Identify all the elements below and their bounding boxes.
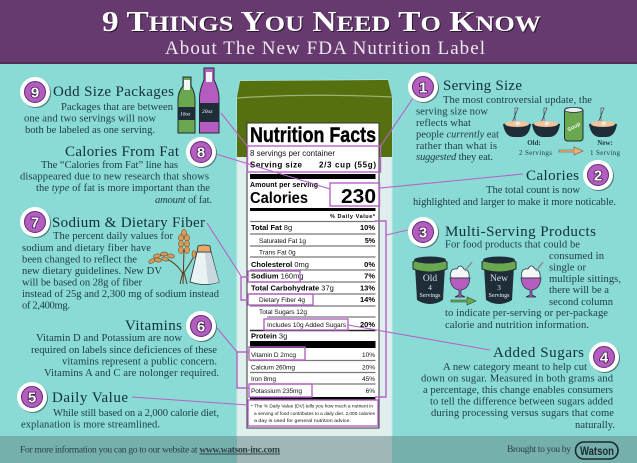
header banner <box>0 0 637 64</box>
body text: suggested they eat. <box>416 152 493 163</box>
panel: 4 added sugars <box>421 342 620 431</box>
subtitle: About The New FDA Nutrition Label <box>165 38 485 59</box>
body text: highlighted and larger to make it more noticable. <box>413 197 616 208</box>
body text: of 2,400mg. <box>22 300 70 312</box>
nutrient rows: Total Fat 8g <box>251 223 292 232</box>
icon: bottles <box>178 68 219 133</box>
icon: old and new containers with sundaes: Servings <box>488 293 510 299</box>
body text: While still based on a 2,000 calorie diet, <box>53 408 219 419</box>
heading: Vitamins <box>125 318 182 334</box>
nutrient rows: Sodium 160mg <box>251 272 304 280</box>
body text: Vitamins A and C are nolonger required. <box>44 368 219 379</box>
badge 2: 2 <box>594 168 602 184</box>
servings <box>250 149 376 170</box>
badge 4: 4 <box>600 350 609 366</box>
calories: Amount per serving <box>250 182 318 189</box>
purple highlight boxes and connectors <box>132 98 523 426</box>
servings: Serving size <box>250 160 303 170</box>
heading: Added Sugars <box>493 345 584 361</box>
icon: bowls and soup can: 1 Serving <box>590 149 620 157</box>
nutrient rows: Protein 3g <box>251 332 287 340</box>
body text: multiple sittings, <box>549 274 621 285</box>
footnote: a serving of food contributes to a daily diet. 2,000 calories <box>254 411 376 417</box>
icon: old and new containers with sundaes: Servings <box>420 293 441 299</box>
footer website text: For more information you can go to our website at www.watson-inc.com <box>20 444 280 456</box>
panel: 5 daily value <box>17 382 219 430</box>
body text <box>413 185 616 208</box>
badge 8 <box>186 137 217 168</box>
nutrient rows: Saturated Fat 1g <box>259 238 306 245</box>
body text: The “Calories from Fat” line has <box>41 160 178 171</box>
body text <box>22 231 220 312</box>
badge 1: 1 <box>419 80 427 96</box>
nutrient rows: 0% <box>364 260 375 269</box>
panel: 8 calories from fat <box>20 137 217 206</box>
body text: new dietary guidelines. New DV <box>22 266 162 277</box>
icon: old and new containers with sundaes: Old <box>423 274 437 284</box>
nutrient rows: 7% <box>364 272 375 280</box>
badge 4 <box>589 342 620 373</box>
body text: required on labels since deficiences of these <box>31 345 217 356</box>
body text: Vitamin D and Potassium are now <box>36 333 182 344</box>
body text: instead of 25g and 2,300 mg of sodium instead <box>22 289 220 300</box>
label title: Nutrition Facts <box>250 124 376 147</box>
badge 5 <box>17 382 48 413</box>
servings: 2/3 cup (55g) <box>319 160 376 170</box>
panel: 2 calories <box>413 160 616 208</box>
heading: Serving Size <box>443 78 522 94</box>
badge 8: 8 <box>197 144 205 162</box>
footnote <box>251 404 376 424</box>
body text: people currently eat <box>416 130 499 140</box>
icon: old and new containers with sundaes: New <box>490 274 508 284</box>
body text: Packages that are between <box>61 102 174 113</box>
nutrient rows: 45% <box>362 376 375 383</box>
nutrient rows: Cholesterol 0mg <box>251 260 309 269</box>
badge 2 <box>583 160 614 191</box>
body text: to tell the difference between sugars added <box>430 396 614 408</box>
calories <box>250 182 376 208</box>
body text: The percent daily values for <box>53 231 173 242</box>
badge 3: 3 <box>419 224 427 242</box>
panel: 9 odd size packages <box>20 68 219 136</box>
body text: reflects what <box>416 118 471 129</box>
body text: one and two servings will now <box>24 114 156 124</box>
body text: A new category meant to help cut <box>443 362 587 373</box>
nutrient rows: Vitamin D 2mcg <box>251 352 296 359</box>
product box <box>237 80 392 463</box>
badge 1 <box>408 72 439 103</box>
body text: both be labeled as one serving. <box>25 125 155 136</box>
heading: Sodium & Dietary Fiber <box>52 215 205 231</box>
nutrient rows: 5% <box>365 238 376 245</box>
nutrient rows: Trans Fat 0g <box>259 250 296 256</box>
nutrient rows: Total Carbohydrate 37g <box>251 284 334 292</box>
icon: old and new containers with sundaes: 4 <box>428 283 432 292</box>
nutrient rows: Potassium 235mg <box>251 388 302 395</box>
body text: vitamins represent a public concern. <box>62 356 217 368</box>
icon: old and new containers with sundaes: 3 <box>497 283 501 292</box>
body text <box>445 240 621 331</box>
badge 9: 9 <box>31 84 39 102</box>
body text: second column <box>549 297 614 308</box>
body text: single or <box>549 262 586 274</box>
heading: Multi-Serving Products <box>445 224 596 240</box>
nutrient rows: 6% <box>366 388 375 395</box>
icon: bowls and soup can: New: <box>597 139 613 147</box>
body text: down on sugar. Measured in both grams and <box>421 374 614 384</box>
title: 9 T HINGS YOU NEED TO K NOW <box>102 7 541 38</box>
body text: For food products that could be <box>445 240 580 250</box>
calories: Calories <box>250 190 308 207</box>
body text: there will be a <box>549 285 609 296</box>
watson logo <box>576 442 618 459</box>
nutrient rows: Dietary Fiber 4g <box>259 297 305 304</box>
nutrient rows: 13% <box>360 284 375 292</box>
nutrient rows: Total Sugars 12g <box>259 309 307 316</box>
body text: explanation is more streamlined. <box>21 420 160 430</box>
panel: 7 sodium and dietary fiber <box>20 207 220 312</box>
footnote: * The % Daily Value (DV) tells you how much a nutrient in <box>251 404 373 410</box>
panel: 6 vitamins <box>31 311 219 379</box>
heading: Calories From Fat <box>65 144 180 160</box>
nutrient rows: Includes 10g Added Sugars <box>267 322 347 329</box>
body text: rather than what is <box>416 141 497 152</box>
nutrient rows: 10% <box>360 223 375 232</box>
body text <box>24 102 174 136</box>
icon: bottles: 20oz <box>202 109 213 115</box>
body text: serving size now <box>416 106 488 118</box>
body text: naturally. <box>575 420 615 431</box>
body text: amount of fat. <box>155 195 212 206</box>
badge 6: 6 <box>197 318 205 336</box>
heading: Daily Value <box>52 390 128 406</box>
badge 7 <box>20 207 51 238</box>
body text <box>20 160 212 206</box>
badge 6 <box>186 311 217 342</box>
body text: to indicate per-serving or per-package <box>445 308 608 319</box>
body text: during processing versus sugars that come <box>431 408 614 419</box>
body text: a percentage, this change enables consumers <box>423 385 613 396</box>
icon: bowls and soup can: Soup <box>567 121 582 133</box>
body text <box>421 362 615 431</box>
panel: 1 serving size <box>408 72 620 163</box>
servings: 8 servings per container <box>250 149 335 158</box>
body text: disappeared due to new research that shows <box>20 172 209 182</box>
body text: the type of fat is more important than the <box>36 183 210 194</box>
body text <box>416 95 592 163</box>
nutrient rows: 20% <box>362 364 375 372</box>
nutrient rows: 14% <box>360 295 375 304</box>
body text: sodium and dietary fiber have <box>22 243 151 254</box>
body text: will be based on 28g of fiber <box>22 278 142 288</box>
heading: Odd Size Packages <box>53 84 174 100</box>
icon: bowls and soup can: 2 Servings <box>519 149 552 157</box>
icon: bottles: 16oz <box>180 112 191 118</box>
icon: wheat and salt shaker <box>148 230 219 284</box>
heading: Calories <box>526 168 579 184</box>
body text: The total count is now <box>486 185 580 196</box>
nutrient rows: Calcium 260mg <box>251 364 295 372</box>
icon: bowls and soup can: Old: <box>527 139 541 147</box>
body text: been changed to reflect the <box>22 254 137 266</box>
body text: calorie and nutrition information. <box>445 320 589 331</box>
nutrient rows <box>250 222 376 400</box>
footnote: a day is used for general nutrition advice. <box>254 418 351 424</box>
body text: consumed in <box>549 251 605 262</box>
nutrient rows: Iron 8mg <box>251 376 276 383</box>
watson logo: Watson <box>580 444 614 458</box>
panel: 3 multi-serving products <box>408 217 621 331</box>
badge 9 <box>20 77 51 108</box>
calories: 230 <box>341 186 376 208</box>
body text: The most controversial update, the <box>443 95 592 106</box>
footer bar <box>0 436 637 463</box>
nutrient rows: 10% <box>362 352 375 359</box>
nutrient rows: 20% <box>360 320 375 329</box>
body text <box>21 408 219 430</box>
nutrition facts label <box>247 123 379 428</box>
badge 7: 7 <box>31 214 39 232</box>
icon: old and new containers with sundaes <box>413 256 543 305</box>
icon: bowls and soup can <box>503 108 620 157</box>
body text <box>31 333 219 379</box>
badge 3 <box>408 217 439 248</box>
footer brought by: Brought to you by <box>507 444 571 455</box>
daily value header: % Daily Value* <box>330 214 376 220</box>
badge 5: 5 <box>28 390 36 406</box>
